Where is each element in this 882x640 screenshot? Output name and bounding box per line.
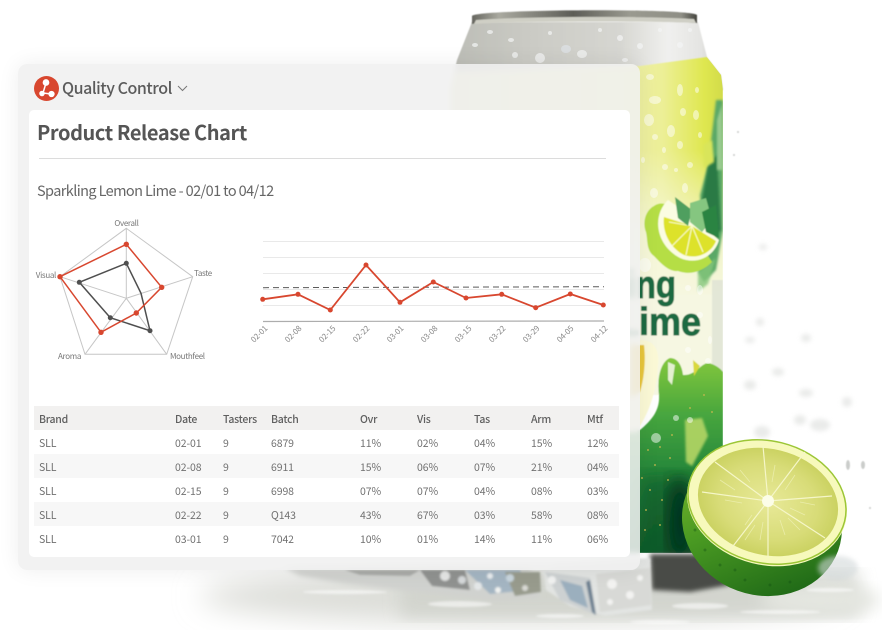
- data table: Q143: [271, 508, 296, 523]
- data table: 9: [223, 484, 229, 499]
- data table: Batch: [271, 412, 299, 427]
- lime rind: [673, 423, 861, 583]
- radar axis labels: Taste: [194, 268, 213, 279]
- data table: 11%: [360, 436, 381, 451]
- data table: 06%: [417, 460, 438, 475]
- data table: 9: [223, 460, 229, 475]
- data table: Vis: [417, 412, 431, 427]
- data table: 58%: [531, 508, 552, 523]
- radar chart: [36, 218, 213, 362]
- radar axis labels: [36, 218, 213, 362]
- lime skin: [661, 428, 863, 618]
- data table: 03%: [587, 484, 608, 499]
- data table: 07%: [417, 484, 438, 499]
- can green artwork: [630, 358, 723, 554]
- date axis labels: 02-22: [351, 323, 373, 345]
- data table: 02-01: [175, 436, 201, 451]
- data table: 07%: [474, 460, 495, 475]
- can rim: [472, 10, 697, 24]
- lime half: [661, 423, 863, 618]
- lime segments: [702, 446, 832, 558]
- data table: 04%: [474, 436, 495, 451]
- radar axis labels: Overall: [114, 218, 139, 229]
- data table: 15%: [531, 436, 552, 451]
- quality trend line: [260, 262, 606, 312]
- droplets on silver shoulder: [472, 28, 692, 63]
- data table: 03-01: [175, 532, 201, 547]
- data table: 12%: [587, 436, 608, 451]
- date axis labels: [249, 323, 611, 345]
- can brand text: [630, 270, 701, 337]
- panel: quality control window: [18, 64, 640, 570]
- radar series: dark: [77, 261, 152, 333]
- data table: 08%: [531, 484, 552, 499]
- data table: SLL: [39, 460, 56, 475]
- app name: Quality Control: [62, 75, 172, 99]
- data table: 02-15: [175, 484, 201, 499]
- radar axis labels: Aroma: [58, 351, 81, 362]
- lemon slice graphic: [644, 197, 719, 273]
- date axis labels: 03-29: [521, 323, 542, 345]
- data table: Mtf: [587, 412, 603, 427]
- data table: Date: [175, 412, 197, 427]
- data table: 14%: [474, 532, 495, 547]
- splash droplets: [744, 244, 858, 580]
- threshold dashed line: [263, 287, 604, 288]
- data table: 11%: [531, 532, 552, 547]
- data table: 02-22: [175, 508, 201, 523]
- data table: 02-08: [175, 460, 201, 475]
- can base shadow: [650, 554, 730, 592]
- data table: 21%: [531, 460, 552, 475]
- data table: 67%: [417, 508, 438, 523]
- subheading: Sparkling Lemon Lime - 02/01 to 04/12: [37, 180, 274, 201]
- icon: dropdown chevron: [178, 86, 188, 92]
- data table: 9: [223, 532, 229, 547]
- date axis labels: 03-15: [453, 323, 474, 345]
- data table: SLL: [39, 508, 56, 523]
- radar axis labels: Mouthfeel: [170, 351, 205, 362]
- heading: Product Release Chart: [37, 117, 247, 146]
- app header: [34, 75, 188, 101]
- data table: 6911: [271, 460, 294, 475]
- can body: [440, 10, 723, 562]
- data table: 15%: [360, 460, 381, 475]
- can brand text: Sparkling: [526, 264, 676, 307]
- date axis labels: 02-08: [283, 323, 305, 345]
- data table: SLL: [39, 484, 56, 499]
- date axis labels: 02-15: [317, 323, 338, 345]
- data table: 07%: [360, 484, 381, 499]
- data table: 6879: [271, 436, 294, 451]
- data table: 9: [223, 436, 229, 451]
- small dark splash marks: [733, 131, 871, 509]
- data table: 02%: [417, 436, 438, 451]
- date axis labels: 03-22: [487, 323, 509, 345]
- radar series: red: [57, 242, 164, 335]
- data table: [34, 406, 619, 547]
- date axis labels: 02-01: [249, 323, 270, 345]
- gold specks on green: [641, 394, 713, 531]
- product photo background: can, lime, ice and splashes: [202, 10, 880, 630]
- data table: Ovr: [360, 412, 377, 427]
- data table: 03%: [474, 508, 495, 523]
- data table: Tas: [474, 412, 490, 427]
- data table: 9: [223, 508, 229, 523]
- line chart: [249, 242, 611, 345]
- date axis labels: 04-12: [589, 323, 611, 345]
- panel: report card: [29, 110, 630, 557]
- data table: 06%: [587, 532, 608, 547]
- date axis labels: 03-08: [419, 323, 441, 345]
- can brand text: Lime: [617, 301, 701, 344]
- data table: 08%: [587, 508, 608, 523]
- data table: 6998: [271, 484, 294, 499]
- data table: 04%: [587, 460, 608, 475]
- data table: SLL: [39, 532, 56, 547]
- data table: 04%: [474, 484, 495, 499]
- data table: 43%: [360, 508, 381, 523]
- lime flesh: [686, 433, 850, 571]
- date axis labels: 04-05: [555, 323, 576, 345]
- ice cube: [543, 558, 652, 616]
- data table: 01%: [417, 532, 438, 547]
- date axis labels: 03-01: [385, 323, 406, 345]
- data table: Arm: [531, 412, 551, 427]
- data table: 10%: [360, 532, 381, 547]
- radar axis labels: Visual: [36, 270, 56, 281]
- data table: SLL: [39, 436, 56, 451]
- water droplets: [639, 74, 712, 443]
- can silver shoulder: [450, 22, 723, 90]
- data table: Brand: [39, 412, 68, 427]
- data table: 7042: [271, 532, 294, 547]
- can label: [472, 28, 723, 554]
- floor reflection: [200, 568, 880, 624]
- lime pulp: [720, 465, 815, 540]
- data table: Tasters: [223, 412, 257, 427]
- crushed ice: [285, 568, 541, 602]
- leaf pattern on can edge: [698, 100, 723, 282]
- icon: quality control logo: [34, 76, 59, 101]
